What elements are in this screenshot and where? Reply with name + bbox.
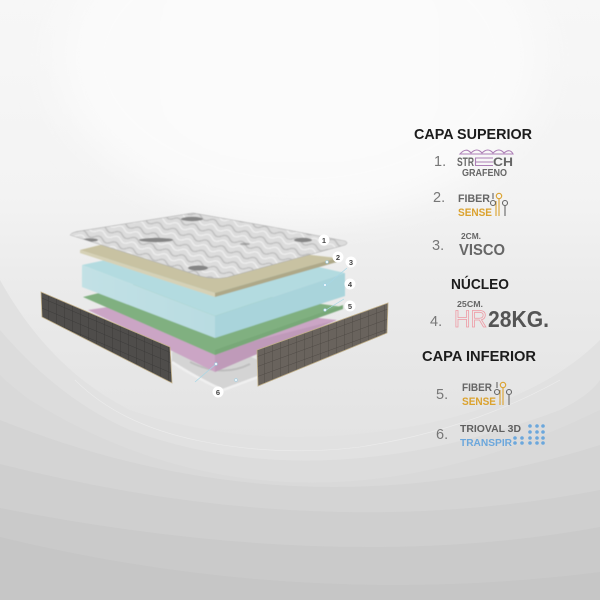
layer 4: green foam xyxy=(83,280,343,355)
callout leader lines xyxy=(195,268,347,382)
callout badges 1 to 6 xyxy=(212,234,356,398)
item 6: trioval 3d transpir: TRANSPIR xyxy=(460,437,512,449)
callout badges 1 to 6: 1 xyxy=(322,236,326,245)
layer 6: bottom white base xyxy=(172,345,258,390)
heading: capa superior: CAPA SUPERIOR xyxy=(414,126,532,143)
item 5: fiber sense: SENSE xyxy=(462,396,496,408)
item 1: stretch grafeno: 1. xyxy=(434,154,446,170)
item 3: visco xyxy=(432,232,505,259)
item 3: visco: VISCO xyxy=(459,242,505,259)
item 6: trioval 3d transpir: TRIOVAL 3D xyxy=(460,423,521,435)
mattress exploded diagram xyxy=(70,213,347,390)
layer 2: beige foam xyxy=(80,235,337,297)
item 2: fiber sense: SENSE xyxy=(458,207,492,219)
item 2: fiber sense: 2. xyxy=(433,190,445,206)
item 6: trioval 3d transpir: 6. xyxy=(436,427,448,443)
item 5: fiber sense: 5. xyxy=(436,387,448,403)
item 4: hr 28kg: 25CM. xyxy=(457,300,483,309)
item 1: stretch grafeno: CH xyxy=(493,157,513,169)
item 5: fiber sense xyxy=(436,382,512,408)
layer 1: quilted top cover xyxy=(70,213,347,278)
item 1: stretch grafeno xyxy=(434,150,513,179)
heading: capa inferior: CAPA INFERIOR xyxy=(422,348,536,365)
item 1: stretch grafeno: STR xyxy=(457,157,475,169)
side panel: right xyxy=(257,303,388,386)
callout badges 1 to 6: 4 xyxy=(348,280,353,289)
item 4: hr 28kg: 4. xyxy=(430,314,442,330)
icon: sensor pins xyxy=(494,382,512,405)
item 1: stretch grafeno: GRAFENO xyxy=(462,168,507,179)
item 2: fiber sense xyxy=(433,190,508,219)
side panel: left xyxy=(41,292,172,383)
item 6: trioval 3d transpir xyxy=(436,423,545,449)
callout badges 1 to 6: 5 xyxy=(348,302,352,311)
item 3: visco: 3. xyxy=(432,238,444,254)
item 4: hr 28kg: 28KG. xyxy=(488,306,549,332)
icon: dot grid xyxy=(513,424,545,445)
icon: sensor pins xyxy=(490,193,508,216)
callout badges 1 to 6: 3 xyxy=(349,258,353,267)
item 4: hr 28kg: HR xyxy=(454,306,487,333)
callout badges 1 to 6: 6 xyxy=(216,388,220,397)
callout badges 1 to 6: 2 xyxy=(336,253,340,262)
layer 3: blue core foam xyxy=(82,240,345,338)
heading: nucleo: NÚCLEO xyxy=(451,275,509,293)
item 4: hr 28kg xyxy=(430,300,549,333)
callout dots xyxy=(215,261,328,381)
item 3: visco: 2CM. xyxy=(461,232,481,241)
item 5: fiber sense: FIBER xyxy=(462,382,492,394)
item 2: fiber sense: FIBER xyxy=(458,193,490,205)
layer 5: pink foam xyxy=(88,300,337,372)
